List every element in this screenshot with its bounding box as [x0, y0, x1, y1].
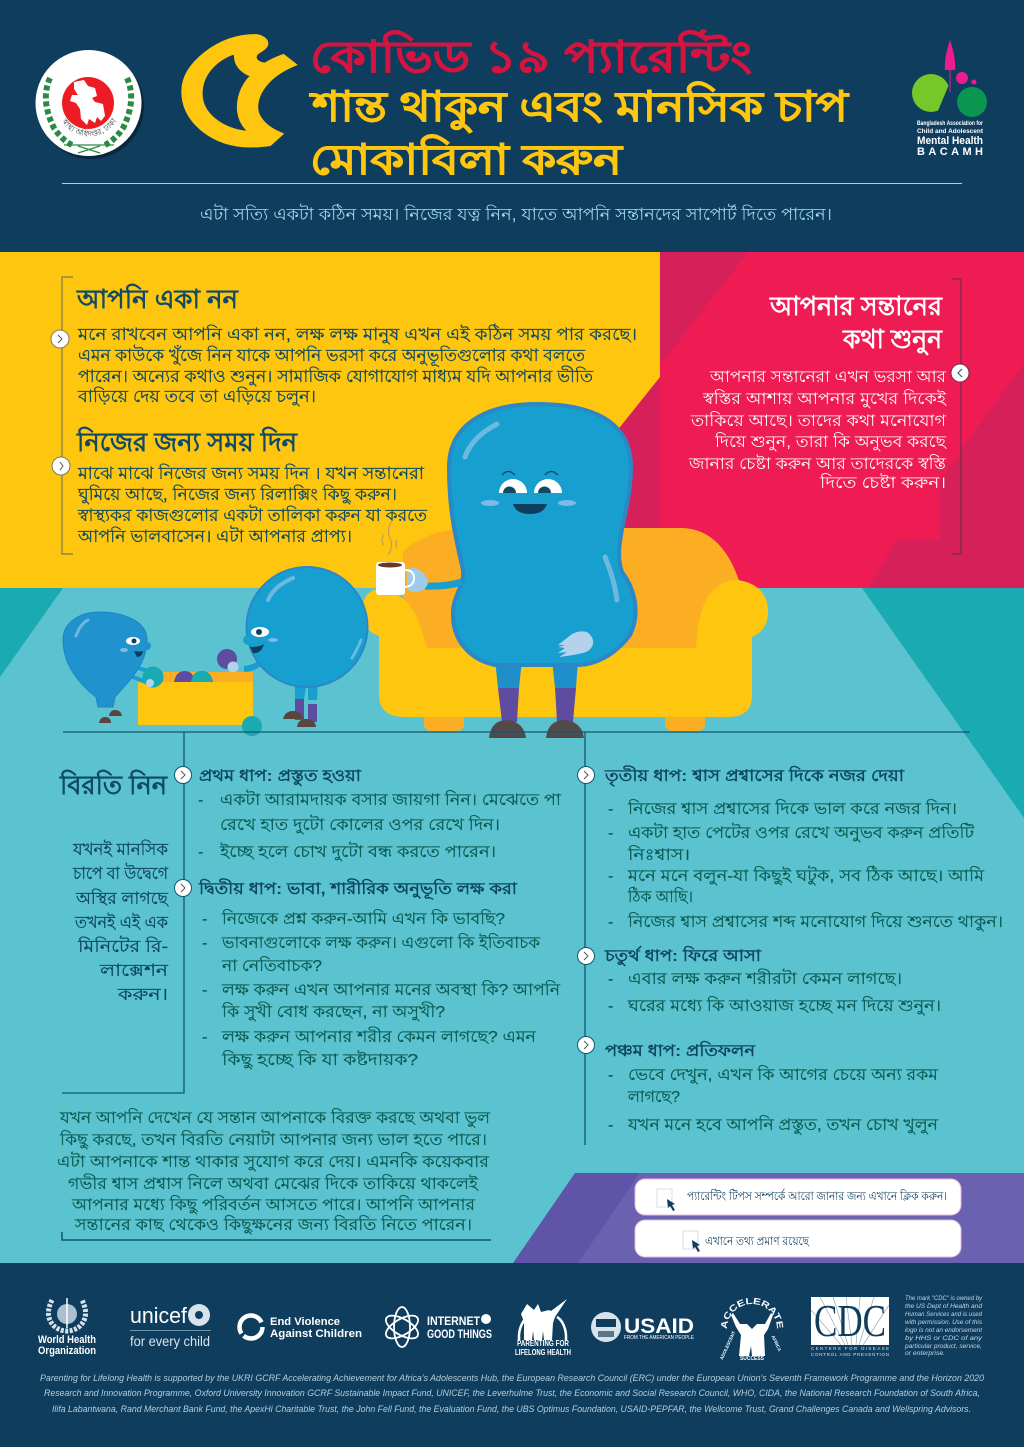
- step 2: কিছু হচ্ছে কি যা কষ্টদায়ক?: [221, 1050, 418, 1070]
- step 1: প্রথম ধাপ: প্রস্তুত হওয়া: [199, 768, 363, 787]
- heading: listen to your child: [769, 291, 944, 356]
- text block: take a pause: [72, 839, 170, 1004]
- logo: BACAMH: Bangladesh Association for: [917, 120, 983, 127]
- step 3: -: [608, 868, 613, 885]
- text block: take a pause: তখনই এই এক: [74, 913, 169, 932]
- logo: UNICEF: unicef: [130, 1303, 188, 1328]
- step 1: -: [198, 792, 203, 809]
- text block: take time for yourself: আপনি ভালবাসেন। এটা আপনার প্রাপ্য।: [77, 526, 352, 546]
- step 1: -: [198, 844, 203, 861]
- heading: listen to your child: আপনার সন্তানের: [769, 291, 944, 321]
- text block: funding acknowledgement: [40, 1373, 984, 1414]
- logo: BACAMH: [912, 40, 987, 158]
- text block: listen to your child: স্বস্তির আশায় আপনার মুখের দিকেই: [702, 389, 947, 408]
- step 1: একটা আরামদায়ক বসার জায়গা নিন। মেঝেতে পা: [220, 790, 561, 809]
- logo: WHO: Organization: [38, 1345, 96, 1357]
- text block: bottom paragraph: গভীর শ্বাস প্রশ্বাস নিলে অথবা মেঝের দিকে তাকিয়ে থাকলেই: [68, 1174, 479, 1193]
- title: মোকাবিলা করুন: [310, 134, 624, 183]
- step 5: ভেবে দেখুন, এখন কি আগের চেয়ে অন্য রকম: [628, 1065, 939, 1084]
- text block: funding acknowledgement: Parenting for Lifelong Health is supported by the UKRI GCRF Accelerating Achievement for Africa’s Adolescents Hub, the European Research Council (ERC) under the European Union’s Seventh Framework Programme and the Horizon 2020: [40, 1373, 984, 1383]
- step 5: যখন মনে হবে আপনি প্রস্তুত, তখন চোখ খুলুন: [627, 1115, 938, 1135]
- text block: bottom paragraph: যখন আপনি দেখেন যে সন্তান আপনাকে বিরক্ত করছে অথবা ভুল: [59, 1108, 491, 1128]
- structure lines: [62, 732, 970, 1145]
- text block: take a pause: অস্থির লাগছে: [75, 888, 170, 908]
- illustration: small child: [63, 612, 164, 723]
- text block: CDC disclaimer: logo is not an endorsement: [905, 1327, 983, 1334]
- text block: funding acknowledgement: Ilifa Labantwana, Rand Merchant Bank Fund, the ApexHi Charitable Trust, the John Fell Fund, the Evaluation Fund, the UBS Optimus Foundation, USAID-PEPFAR, the Wellcome Trust, Grand Challenges Canada and Wellspring Advisors.: [52, 1404, 971, 1414]
- step 2: লক্ষ করুন আপনার শরীর কেমন লাগছে? এমন: [221, 1027, 536, 1046]
- text block: bottom paragraph: [57, 1108, 491, 1235]
- divider line: [62, 183, 962, 184]
- step 1: ইচ্ছে হলে চোখ দুটো বন্ধ করতে পারেন।: [219, 842, 496, 861]
- button: evidence link: [635, 1220, 961, 1257]
- text block: CDC disclaimer: the US Dept of Health and: [905, 1303, 982, 1310]
- text block: bottom paragraph: আপনার মধ্যে কিছু পরিবর্তন আসতে পারে। আপনি আপনার: [71, 1195, 476, 1215]
- step 2: -: [202, 911, 207, 928]
- text block: you are not alone: পারেন। অন্যের কথাও শুনুন। সামাজিক যোগাযোগ মাধ্যম যদি আপনার ভীতি: [78, 366, 593, 386]
- title: কোভিড ১৯ প্যারেন্টিং: [310, 29, 752, 82]
- logo: End Violence Against Children: Against Children: [270, 1328, 362, 1340]
- logo: Internet of Good Things: [382, 1307, 492, 1347]
- panel: purple link background: [513, 1173, 1024, 1263]
- text block: CDC disclaimer: particular product, service,: [904, 1343, 982, 1350]
- text block: listen to your child: তাকিয়ে আছে। তাদের কথা মনোযোগ: [690, 411, 947, 430]
- logo: CDC: [811, 1295, 889, 1357]
- logo: BACAMH: BACAMH: [917, 146, 983, 158]
- text block: you are not alone: বাড়িয়ে দেয় তবে তা এড়িয়ে চলুন।: [77, 386, 316, 406]
- step 2: -: [202, 982, 207, 999]
- step 1: রেখে হাত দুটো কোলের ওপর রেখে দিন।: [220, 815, 500, 834]
- text block: take a pause: লাক্সেশন: [99, 961, 169, 980]
- bracket: right listen: [952, 279, 961, 554]
- panel: pink listen background: [600, 252, 1024, 588]
- illustration: sofa: [362, 528, 768, 731]
- step 2: নিজেকে প্রশ্ন করুন-আমি এখন কি ভাবছি?: [221, 909, 505, 928]
- step 4: -: [608, 971, 613, 988]
- logo: government health directorate: স্বাস্থ্য অধিদপ্তর, ঢাকা: [64, 118, 116, 136]
- text block: take time for yourself: স্বাস্থ্যকর কাজগুলোর একটা তালিকা করুন যা করতে: [77, 505, 427, 525]
- logo: Parenting for Lifelong Health: LIFELONG HEALTH: [515, 1348, 571, 1357]
- text block: bottom paragraph: কিছু করছে, তখন বিরতি নেয়াটা আপনার জন্য ভাল হতে পারে।: [59, 1130, 487, 1150]
- step 2: না নেতিবাচক?: [221, 956, 322, 975]
- title: [309, 29, 850, 183]
- logo: WHO: World Health: [38, 1334, 96, 1346]
- logo: Accelerate: AFRICA: [771, 1335, 783, 1353]
- illustration: coffee mug with steam: [376, 520, 414, 595]
- text block: CDC disclaimer: or enterprise.: [905, 1350, 945, 1357]
- step 5: লাগছে?: [627, 1089, 680, 1106]
- step 2: দ্বিতীয় ধাপ: ভাবা, শারীরিক অনুভূতি লক্ষ করা: [198, 878, 519, 900]
- text block: take time for yourself: [77, 463, 427, 546]
- text block: listen to your child: দিয়ে শুনুন, তারা কি অনুভব করছে: [714, 432, 947, 451]
- logo: WHO: [38, 1298, 96, 1357]
- heading: take a pause: বিরতি নিন: [59, 769, 168, 800]
- button: parenting tips link: প্যারেন্টিং টিপস সম্পর্কে আরো জানার জন্য এখানে ক্লিক করুন।: [687, 1189, 947, 1203]
- button: parenting tips link: [635, 1179, 961, 1215]
- panel: teal main background: [0, 588, 1024, 1263]
- arrow marker 3: [951, 364, 969, 382]
- arrow marker 2: [52, 457, 70, 475]
- step 5: -: [608, 1117, 613, 1134]
- step 5: [578, 1036, 939, 1135]
- text block: CDC disclaimer: [904, 1295, 983, 1357]
- text block: take time for yourself: ঘুমিয়ে আছে, নিজের জন্য রিলাক্সিং কিছু করুন।: [77, 484, 397, 505]
- text block: listen to your child: [688, 369, 947, 492]
- logo: CDC: CONTROL AND PREVENTION: [811, 1352, 889, 1357]
- text block: listen to your child: দিতে চেষ্টা করুন।: [819, 473, 946, 492]
- text block: CDC disclaimer: The mark "CDC" is owned by: [905, 1295, 983, 1302]
- step 5: -: [608, 1067, 613, 1084]
- panel: header background: [0, 0, 1024, 252]
- logo: CDC: CENTERS FOR DISEASE: [811, 1346, 889, 1351]
- text block: CDC disclaimer: by HHS or CDC of any: [905, 1335, 983, 1342]
- logo: UNICEF: [130, 1303, 211, 1349]
- panel: yellow tips background: [0, 252, 660, 588]
- step 3: নিজের শ্বাস প্রশ্বাসের শব্দ মনোযোগ দিয়ে শুনতে থাকুন।: [627, 912, 1003, 931]
- text block: CDC disclaimer: Human Services and is used: [905, 1311, 982, 1318]
- text block: take a pause: চাপে বা উদ্বেগে: [72, 863, 169, 883]
- heading: take time for yourself: নিজের জন্য সময় দিন: [76, 426, 298, 457]
- logo: End Violence Against Children: [240, 1316, 362, 1340]
- step 3: -: [608, 914, 613, 931]
- button: evidence link: এখানে তথ্য প্রমাণ রয়েছে: [705, 1234, 810, 1248]
- step 3: একটা হাত পেটের ওপর রেখে অনুভব করুন প্রতিটি: [628, 823, 974, 842]
- step 5: পঞ্চম ধাপ: প্রতিফলন: [605, 1040, 757, 1060]
- illustration: parent character: [407, 404, 636, 738]
- arrow marker 1: [51, 330, 69, 348]
- step 4: ঘরের মধ্যে কি আওয়াজ হচ্ছে মন দিয়ে শুনুন।: [627, 996, 941, 1015]
- step 3: নিজের শ্বাস প্রশ্বাসের দিকে ভাল করে নজর দিন।: [627, 799, 957, 818]
- logo: Accelerate: SUCCESS: [740, 1356, 765, 1362]
- text block: you are not alone: মনে রাখবেন আপনি একা নন, লক্ষ লক্ষ মানুষ এখন এই কঠিন সময় পার করছে।: [77, 324, 637, 344]
- logo: USAID: FROM THE AMERICAN PEOPLE: [624, 1335, 695, 1341]
- illustration: middle child: [217, 567, 368, 727]
- text block: take a pause: করুন।: [117, 985, 168, 1004]
- text block: CDC disclaimer: with permission. Use of this: [905, 1319, 983, 1326]
- logo: Parenting for Lifelong Health: [515, 1299, 571, 1357]
- text block: funding acknowledgement: Research and Innovation Programme, Oxford University Innovation GCRF Sustainable Impact Fund, UNICEF, the Leverhulme Trust, the Economic and Social Research Council, WHO, CIDA, the National Research Foundation of South Africa,: [44, 1388, 980, 1398]
- logo: BACAMH: Mental Health: [917, 135, 983, 147]
- text block: listen to your child: জানার চেষ্টা করুন আর তাদেরকে স্বস্তি: [688, 454, 947, 473]
- step 3: ঠিক আছি।: [627, 887, 693, 906]
- step 2: ভাবনাগুলোকে লক্ষ করুন। এগুলো কি ইতিবাচক: [221, 933, 541, 952]
- step 2: কি সুখী বোধ করছেন, না অসুখী?: [221, 1002, 445, 1021]
- logo: USAID: [591, 1312, 695, 1342]
- logo: Internet of Good Things: GOOD THINGS: [427, 1327, 492, 1341]
- text block: bottom paragraph: এটা আপনাকে শান্ত থাকার সুযোগ করে দেয়। এমনকি কয়েকবার: [57, 1152, 490, 1171]
- step 2: -: [202, 935, 207, 952]
- step 2: [174, 878, 560, 1070]
- step 2: -: [202, 1029, 207, 1046]
- logo: USAID: USAID: [624, 1315, 694, 1338]
- title: শান্ত থাকুন এবং মানসিক চাপ: [309, 81, 850, 134]
- step 3: -: [608, 825, 613, 842]
- text block: take a pause: মিনিটের রি-: [77, 936, 168, 956]
- step 3: মনে মনে বলুন-যা কিছুই ঘটুক, সব ঠিক আছে। আমি: [627, 866, 985, 886]
- step 3: -: [608, 801, 613, 818]
- logo: CDC: CDC: [814, 1295, 886, 1346]
- step 1: [174, 766, 561, 861]
- heading: listen to your child: কথা শুনুন: [842, 324, 943, 356]
- illustration: toy box and balls: [138, 671, 262, 736]
- text block: you are not alone: এমন কাউকে খুঁজে নিন যাকে আপনি ভরসা করে অনুভূতিগুলোর কথা বলতে: [78, 345, 585, 366]
- heading: you are not alone: আপনি একা নন: [76, 283, 239, 314]
- step 4: -: [608, 998, 613, 1015]
- logo: Accelerate: ACCELERATE: [721, 1298, 784, 1329]
- logo: government health directorate: [36, 50, 144, 159]
- panel: footer background: [0, 1263, 1024, 1447]
- logo: Internet of Good Things: INTERNET: [427, 1314, 481, 1328]
- step 2: লক্ষ করুন এখন আপনার মনের অবস্থা কি? আপনি: [221, 980, 560, 999]
- logo: UNICEF: for every child: [130, 1333, 210, 1349]
- text block: take time for yourself: মাঝে মাঝে নিজের জন্য সময় দিন । যখন সন্তানেরা: [77, 463, 425, 483]
- step 4: [578, 945, 941, 1015]
- logo: Accelerate: ADOLESCENT: [719, 1330, 737, 1360]
- text block: take a pause: যখনই মানসিক: [72, 839, 169, 859]
- logo: End Violence Against Children: End Violence: [270, 1316, 340, 1328]
- step 3: তৃতীয় ধাপ: শ্বাস প্রশ্বাসের দিকে নজর দেয়া: [604, 765, 906, 787]
- text block: bottom paragraph: সন্তানের কাছ থেকেও কিছুক্ষনের জন্য বিরতি নিতে পারেন।: [74, 1215, 472, 1235]
- text block: listen to your child: আপনার সন্তানেরা এখন ভরসা আর: [709, 369, 947, 386]
- logo: Parenting for Lifelong Health: PARENTING FOR: [517, 1339, 569, 1348]
- step 4: এবার লক্ষ করুন শরীরটা কেমন লাগছে।: [628, 969, 902, 988]
- step 4: চতুর্থ ধাপ: ফিরে আসা: [604, 945, 763, 967]
- bracket: left tips: [62, 277, 73, 554]
- logo: Accelerate: [719, 1298, 784, 1362]
- step 3: [578, 765, 1003, 931]
- logo: BACAMH: Child and Adolescent: [917, 128, 984, 135]
- step 3: নিঃশ্বাস।: [627, 845, 690, 864]
- text block: you are not alone: [77, 324, 637, 406]
- subtitle: এটা সত্যি একটা কঠিন সময়। নিজের যত্ন নিন, যাতে আপনি সন্তানদের সাপোর্ট দিতে পারেন।: [200, 204, 832, 224]
